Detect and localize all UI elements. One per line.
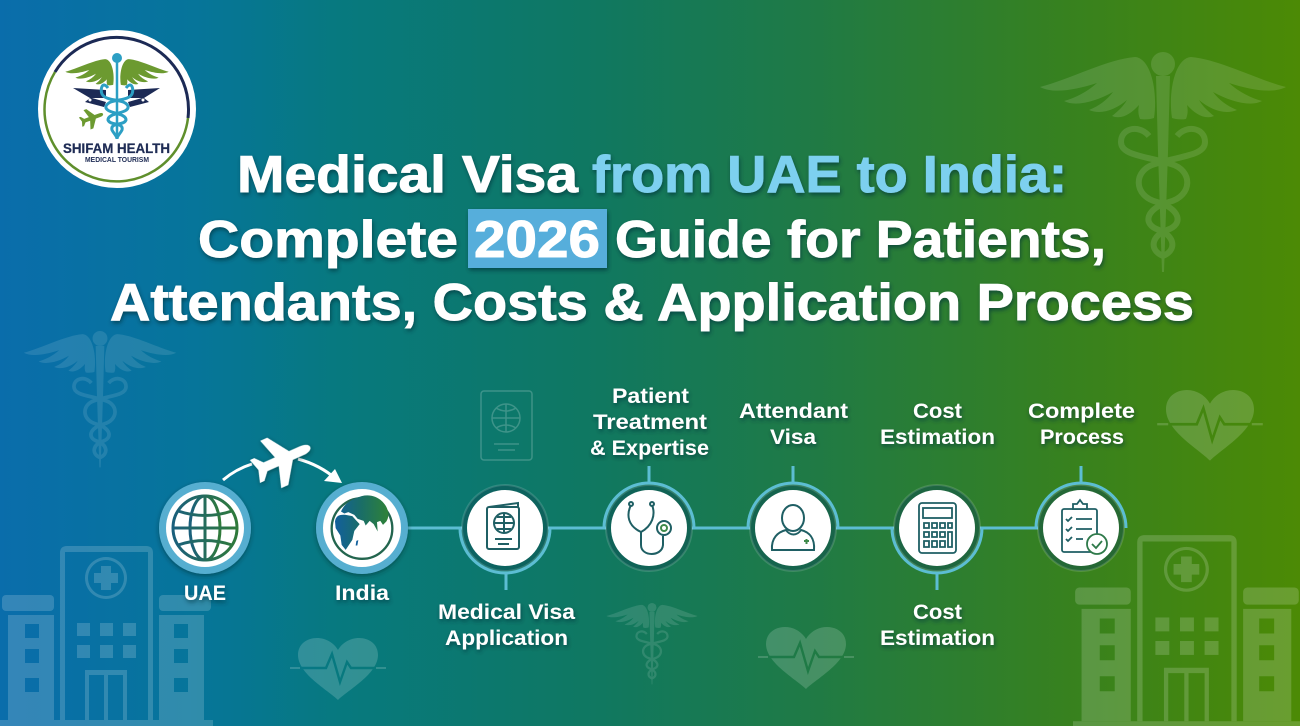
label: Cost Estimation top: Cost bbox=[913, 400, 962, 423]
timeline connectors bbox=[405, 526, 1038, 530]
icon: stethoscope bbox=[628, 502, 671, 554]
label: Attendant Visa: Attendant bbox=[739, 400, 848, 423]
label: Medical Visa Application: Application bbox=[445, 627, 568, 650]
watermark: heart right bbox=[1157, 390, 1263, 461]
title: line 2: Complete bbox=[198, 211, 458, 269]
label: Patient Treatment & Expertise: & Expertise bbox=[590, 437, 709, 460]
icon: clipboard checklist bbox=[1062, 500, 1107, 554]
label: UAE: UAE bbox=[184, 582, 226, 605]
label: Patient Treatment & Expertise: Treatment bbox=[593, 411, 707, 434]
logo: caduceus staff bbox=[101, 53, 133, 139]
label: India: India bbox=[335, 582, 389, 605]
step: Complete Process bbox=[1028, 400, 1135, 571]
title: line 1 bbox=[237, 146, 1067, 204]
label: Patient Treatment & Expertise: Patient bbox=[612, 385, 689, 408]
logo: tagline: MEDICAL TOURISM bbox=[85, 155, 149, 164]
title: line 1: Medical Visa bbox=[237, 146, 579, 204]
label: Cost Estimation top: Estimation bbox=[880, 426, 995, 449]
title bbox=[110, 146, 1194, 332]
logo bbox=[38, 30, 196, 188]
logo: green wings bbox=[65, 59, 169, 85]
watermark: caduceus top right bbox=[1040, 52, 1286, 272]
watermark: hospital left bbox=[0, 546, 213, 726]
flight arrow: UAE to India bbox=[223, 423, 342, 495]
label: Attendant Visa bbox=[739, 400, 848, 449]
watermark: heart centre bbox=[758, 627, 854, 689]
label: Cost Estimation bottom: Estimation bbox=[880, 627, 995, 650]
step: Attendant Visa bbox=[739, 400, 848, 571]
label: Patient Treatment & Expertise bbox=[590, 385, 709, 460]
step: Cost Estimation bbox=[880, 400, 995, 650]
title: line 2: Guide for Patients, bbox=[615, 211, 1106, 269]
label: Attendant Visa: Visa bbox=[770, 426, 816, 449]
title: line 2 bbox=[198, 209, 1106, 269]
title: line 1: from UAE to India: bbox=[592, 146, 1067, 204]
label: Complete Process: Process bbox=[1040, 426, 1124, 449]
watermark: heart left bbox=[290, 638, 386, 700]
logo: name: SHIFAM HEALTH bbox=[63, 140, 170, 156]
label: Medical Visa Application: Medical Visa bbox=[438, 601, 575, 624]
icon: earth bbox=[332, 495, 392, 559]
icon: globe bbox=[173, 496, 237, 560]
icon: passport bbox=[487, 503, 519, 549]
label: Cost Estimation bottom: Cost bbox=[913, 601, 962, 624]
watermark: hospital right bbox=[1073, 535, 1300, 726]
icon: attendant bbox=[772, 505, 814, 550]
label: Complete Process: Complete bbox=[1028, 400, 1135, 423]
icon: airplane bbox=[244, 423, 321, 495]
label: Cost Estimation top bbox=[880, 400, 995, 449]
watermark: caduceus bottom centre bbox=[606, 603, 698, 684]
step: UAE bbox=[159, 482, 251, 605]
title: line 3: Attendants, Costs & Application Process bbox=[110, 274, 1194, 332]
step: Patient Treatment & Expertise bbox=[590, 385, 709, 571]
label: Complete Process bbox=[1028, 400, 1135, 449]
title: line 2: 2026 bbox=[474, 211, 600, 269]
watermark: caduceus left bbox=[24, 331, 176, 467]
logo: navy wings bbox=[73, 88, 160, 107]
icon: calculator bbox=[919, 503, 956, 553]
label: Cost Estimation bottom bbox=[880, 601, 995, 650]
logo: plane bbox=[77, 104, 107, 132]
label: Medical Visa Application bbox=[438, 601, 575, 650]
watermark: passport bbox=[481, 391, 532, 460]
step: India bbox=[316, 482, 408, 605]
step: Medical Visa Application bbox=[438, 485, 575, 650]
